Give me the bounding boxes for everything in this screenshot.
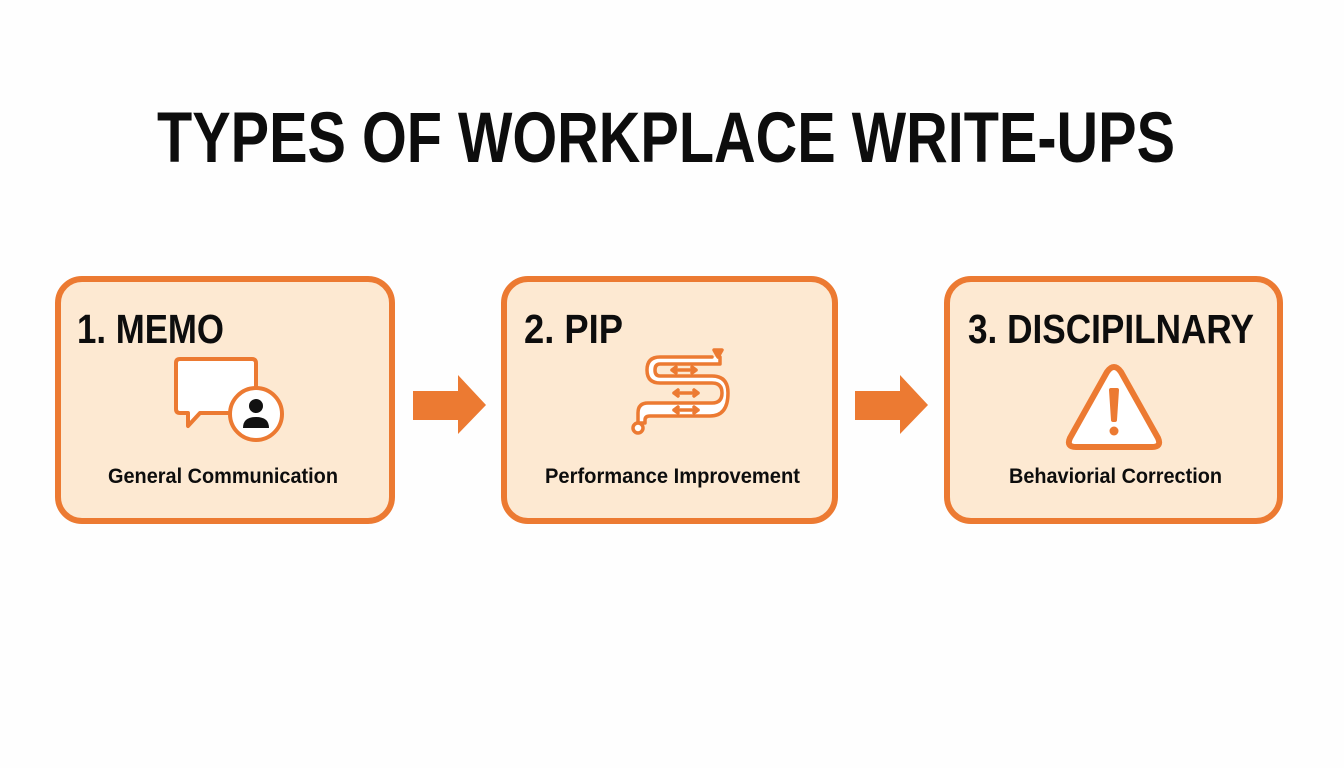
caption: pip: Performance Improvement [545,465,800,488]
heading: pip: 2. PIP [524,306,623,352]
arrow 1 [413,375,486,434]
arrow 2 [855,375,928,434]
panel: memo [58,279,392,521]
panel: pip [504,279,835,521]
icon: winding path [633,350,728,433]
panel: disciplinary [947,279,1280,521]
icon: chat bubble with person [176,359,282,440]
heading: memo: 1. MEMO [77,306,224,352]
heading: disciplinary: 3. DISCIPILNARY [968,306,1254,352]
caption: disciplinary: Behaviorial Correction [1009,465,1222,488]
icon: warning triangle [1069,367,1159,447]
caption: memo: General Communication [108,465,338,488]
